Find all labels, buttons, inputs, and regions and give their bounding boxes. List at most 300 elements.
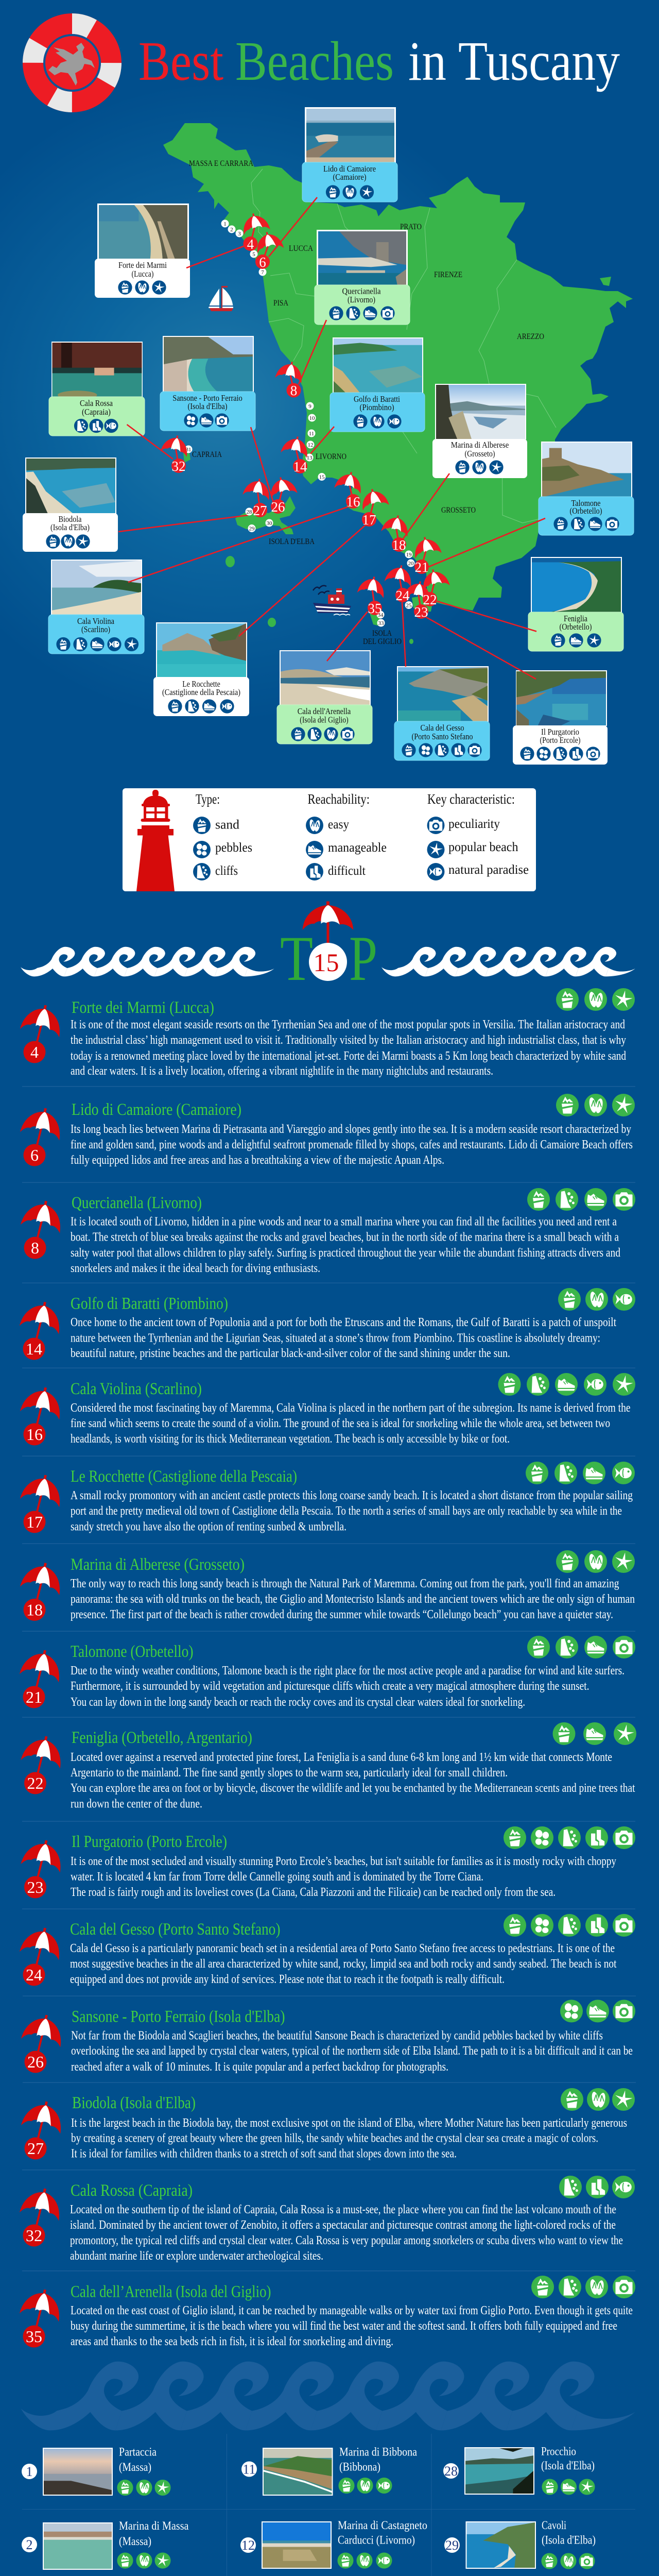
heading: Cala Rossa (Capraia) [71, 2181, 193, 2200]
small beach markers: 5 [252, 251, 255, 258]
province labels: CAPRAIA [192, 450, 222, 459]
beach 12 Marina di Castagneto Carducci: Marina di Castagneto [338, 2519, 427, 2532]
beach 12 Marina di Castagneto Carducci [240, 2519, 427, 2569]
list entry: Cala Violina [20, 1373, 635, 1446]
heading: Top 15 [21, 902, 635, 994]
marker 23: 23 [27, 1878, 43, 1896]
icons [556, 1550, 635, 1573]
panel [528, 612, 623, 651]
beach 29 Cavoli: Cavoli [542, 2519, 566, 2532]
province labels: DEL GIGLIO [363, 637, 402, 646]
description [71, 1018, 626, 1078]
wave left [21, 947, 274, 976]
beach 28 Procchio: Procchio [541, 2445, 576, 2458]
panel [48, 615, 144, 654]
marker 4 [20, 1001, 65, 1063]
small beach markers: 11 [309, 431, 314, 437]
photo [25, 457, 116, 514]
location: (Scarlino) [81, 624, 110, 634]
photo [397, 666, 489, 722]
card: Cala dell'Arenella [277, 650, 372, 744]
description [71, 1577, 635, 1621]
column: type: Type: [196, 791, 220, 807]
name: Cala Rossa [80, 398, 113, 408]
top 15 umbrella markers on map: 27 [253, 503, 267, 518]
card: Sansone - Porto Ferraio [160, 336, 255, 431]
description [71, 1401, 630, 1446]
heading: Il Purgatorio (Porto Ercole) [72, 1833, 227, 1851]
title [138, 31, 620, 92]
beach 29 Cavoli: (Isola d'Elba) [542, 2534, 596, 2546]
column: key characteristic: Key characteristic: [427, 791, 515, 807]
description [71, 1489, 633, 1533]
photo [97, 204, 189, 259]
name: Cala Violina [77, 616, 114, 626]
icons [556, 1094, 635, 1116]
icons [553, 1722, 636, 1745]
column: type: sand [215, 818, 240, 832]
list entry: Cala del Gesso [20, 1914, 635, 1986]
small beach markers: 33 [378, 620, 384, 626]
icons [118, 280, 166, 295]
location: (Grosseto) [464, 449, 495, 459]
card: Cala del Gesso [394, 666, 490, 760]
list entry: Cala Rossa [20, 2176, 635, 2263]
small beach markers: 1 [223, 221, 227, 227]
location: (Castiglione della Pescaia) [162, 687, 240, 697]
province labels: MASSA E CARRARA [189, 159, 253, 168]
card: Quercianella [315, 230, 410, 325]
icons [504, 1914, 635, 1937]
card: Golfo di Baratti [330, 337, 425, 432]
column: reachability: Reachability: [308, 791, 370, 807]
island: Giglio [370, 613, 385, 626]
beach 2 Marina di Massa: Marina di Massa [119, 2519, 188, 2532]
title: in [408, 31, 446, 92]
heading: Talomone (Orbetello) [71, 1642, 194, 1661]
marker 22: 22 [27, 1774, 43, 1792]
small beach markers: 30 [267, 520, 272, 527]
location: (Camaiore) [333, 172, 367, 182]
icons [559, 2176, 635, 2198]
small beach markers: 10 [309, 415, 315, 421]
photo [156, 622, 247, 677]
icons [402, 743, 482, 757]
list entry: Quercianella [21, 1188, 635, 1275]
panel [302, 162, 397, 202]
description [71, 1316, 616, 1360]
beach 1 Partaccia: Partaccia [119, 2445, 157, 2459]
small beach markers: 15 [319, 474, 325, 480]
panel [432, 439, 527, 478]
beach 2 Marina di Massa: 2 [26, 2537, 33, 2552]
province labels: PISA [273, 299, 288, 308]
beach 28 Procchio: (Isola d'Elba) [541, 2459, 595, 2472]
icons [455, 460, 504, 474]
island: Montecristo [268, 618, 276, 627]
heading: Quercianella (Livorno) [72, 1194, 202, 1212]
panel [315, 285, 410, 325]
icons [526, 1462, 635, 1484]
photo [305, 107, 396, 163]
location: (Orbetello) [569, 506, 602, 516]
connector lines from cards to markers [118, 197, 545, 679]
top 15 umbrella markers on map: 22 [423, 592, 437, 607]
province labels: ISOLA D'ELBA [269, 537, 315, 546]
panel [513, 725, 608, 765]
top 15 umbrella markers on map: 23 [414, 604, 428, 620]
list entry: Il Purgatorio [21, 1826, 635, 1899]
location: (Lucca) [132, 269, 153, 279]
top 15 umbrella markers on map: 14 [293, 459, 307, 474]
panel [330, 393, 425, 432]
heading: Lido di Camaiore (Camaiore) [72, 1100, 241, 1119]
beach 1 Partaccia [22, 2445, 171, 2496]
column: key characteristic [427, 791, 529, 880]
small beach markers: 34 [378, 612, 384, 618]
marker 35 [20, 2285, 65, 2347]
description: fully equipped lidos and free areas and has a breathtaking a view of the majestic Apuan Alps. [71, 1154, 444, 1167]
photo [51, 560, 142, 615]
top 15 umbrella markers on map: 18 [392, 537, 406, 553]
heading: Golfo di Baratti (Piombino) [71, 1294, 228, 1313]
card: Biodola [23, 457, 118, 552]
description: Argentario to the mainland. The fine sand gently slopes to the warm sea, particularly ideal for small children. [71, 1766, 508, 1780]
marker 35: 35 [26, 2327, 42, 2346]
column: key characteristic: popular beach [448, 840, 518, 854]
province borders [251, 169, 556, 523]
description: It is ideal for families with children thanks to a stretch of soft sand that slopes down into the sea. [71, 2147, 457, 2161]
province labels: LUCCA [289, 244, 313, 253]
marker 24: 24 [26, 1965, 42, 1984]
description: equipped and does not provide any kind of services. Please note that to reach it the footpath is really difficult. [70, 1973, 505, 1986]
icons [329, 306, 395, 320]
description [70, 1942, 617, 1986]
heading: Cala Violina (Scarlino) [71, 1380, 202, 1398]
column: type [193, 791, 252, 880]
marker 14 [20, 1298, 65, 1360]
name: Feniglia [564, 614, 587, 623]
description: You can lay down in the long sandy beach or reach the rocky coves and its crystal clear waters ideal for snorkeling. [71, 1696, 525, 1709]
marker 21: 21 [26, 1688, 42, 1706]
marker 32 [20, 2184, 65, 2246]
title: Beaches [235, 31, 394, 92]
list entry: Marina di Alberese [20, 1550, 635, 1621]
wave right [381, 947, 635, 976]
description: run down the center of the dune. [71, 1797, 202, 1810]
description [71, 1751, 635, 1810]
marker 4: 4 [30, 1043, 39, 1061]
description: snorkelers and makes it the ideal beach for diving enthusiasts. [71, 1262, 320, 1275]
list entry: Golfo di Baratti [20, 1288, 635, 1360]
marker 17: 17 [26, 1513, 43, 1531]
name: Talomone [571, 498, 600, 508]
list entry: Sansone [21, 2000, 635, 2074]
name: Lido di Camaiore [323, 164, 376, 174]
top 15 umbrella markers on map: 26 [271, 499, 285, 515]
beach 2 Marina di Massa [22, 2519, 188, 2570]
icons [168, 699, 234, 714]
icons [527, 1636, 635, 1658]
top 15 umbrella markers on map: 21 [415, 560, 428, 575]
marker 18: 18 [26, 1600, 43, 1619]
description [71, 1664, 625, 1709]
marker 6 [20, 1104, 65, 1166]
list entry: Lido di Camaiore [20, 1094, 635, 1167]
top 15 umbrella markers on map: 16 [346, 494, 360, 510]
heading: Forte dei Marmi (Lucca) [72, 998, 214, 1017]
photo [317, 230, 408, 285]
top 15 umbrella markers on map: 8 [290, 383, 297, 398]
column: key characteristic: natural paradise [448, 863, 529, 877]
column: reachability [306, 791, 387, 880]
heading: Top 15: 15 [313, 948, 339, 977]
icons [504, 1826, 635, 1849]
column: reachability: easy [328, 818, 349, 832]
photo [531, 557, 622, 613]
beach 1 Partaccia: 1 [26, 2464, 33, 2479]
top 15 umbrella markers on map: 24 [395, 588, 410, 603]
small beach markers: 20 [408, 561, 414, 567]
small beach markers: 28 [246, 509, 252, 515]
beach 11 Marina di Bibbona: (Bibbona) [339, 2461, 380, 2473]
description: reached after a walk of 10 minutes. It is quite popular and a perfect backdrop for photographs. [71, 2060, 448, 2074]
beach 1 Partaccia: (Massa) [119, 2461, 151, 2473]
column: key characteristic: peculiarity [448, 817, 500, 831]
top 15 umbrella markers on map: 17 [362, 512, 376, 528]
card: Forte dei Marmi [95, 204, 190, 298]
logo: lifebuoy with Pegasus [23, 13, 122, 112]
umbrella [303, 902, 353, 948]
icons [553, 517, 619, 531]
icons [46, 534, 90, 549]
marker 26 [21, 2011, 66, 2073]
province labels: FIRENZE [434, 270, 462, 279]
marker 32: 32 [26, 2226, 42, 2245]
small beach markers: 31 [185, 447, 192, 453]
marker 24 [20, 1924, 65, 1986]
card: Talomone [539, 442, 634, 535]
column: type: cliffs [215, 864, 238, 878]
province labels: PRATO [400, 223, 422, 231]
province labels: GROSSETO [441, 506, 476, 515]
icons [527, 1188, 635, 1211]
description [71, 1855, 616, 1899]
heading: Marina di Alberese (Grosseto) [71, 1555, 245, 1574]
small beach markers: 3 [238, 231, 241, 237]
letter T: T [280, 923, 313, 994]
description: water. It is located 4 km far from Torre delle Cannelle going south and is dominated by the Torre Ciana. [71, 1870, 483, 1884]
title: Best [138, 31, 223, 92]
location: (Livorno) [348, 295, 375, 304]
Argentario [412, 595, 432, 612]
name: Forte dei Marmi [118, 260, 167, 270]
column: reachability: difficult [328, 864, 366, 878]
location: (Isola del Giglio) [300, 715, 349, 724]
marker 23 [21, 1836, 66, 1898]
icons [560, 2000, 635, 2023]
island: Pianosa [226, 556, 235, 567]
list entry: Feniglia [21, 1722, 636, 1810]
panel [49, 397, 145, 436]
beach 11 Marina di Bibbona: Marina di Bibbona [339, 2445, 417, 2459]
small beach markers [184, 219, 415, 626]
small beach markers: 13 [307, 455, 313, 461]
card: Le Rocchette [153, 622, 249, 716]
description: areas and thanks to the sea beds rich in fish, it is ideal for snorkeling and diving. [71, 2335, 393, 2348]
beach 11 Marina di Bibbona [241, 2445, 417, 2496]
province labels: LIVORNO [316, 452, 346, 461]
name: Quercianella [342, 286, 381, 296]
location: (Capraia) [82, 407, 111, 417]
heading: Sansone - Porto Ferraio (Isola d'Elba) [72, 2007, 285, 2026]
top 15 umbrella markers on map: 35 [368, 601, 382, 616]
list entry: Biodola [21, 2088, 635, 2161]
location: (Piombino) [359, 402, 394, 412]
icon: sailboat [209, 286, 233, 311]
photo [51, 342, 143, 399]
beach 12 Marina di Castagneto Carducci: 12 [241, 2538, 255, 2553]
photo [435, 384, 526, 439]
location: (Isola d'Elba) [50, 522, 90, 532]
card: Il Purgatorio [513, 670, 608, 765]
marker 16: 16 [26, 1425, 43, 1444]
province labels: AREZZO [517, 332, 544, 341]
icons [74, 419, 118, 433]
beach 29 Cavoli [444, 2519, 596, 2569]
icons [184, 413, 229, 428]
marker 21 [20, 1646, 65, 1708]
panel [160, 392, 255, 431]
icons [353, 414, 402, 429]
top 15 umbrella markers on map: 32 [172, 459, 185, 474]
photo [163, 336, 254, 392]
marker 26: 26 [27, 2053, 44, 2071]
big faded wave [21, 2362, 635, 2430]
icons [531, 2276, 635, 2298]
mainland [163, 123, 633, 611]
small beach markers: 9 [308, 403, 311, 410]
panel [277, 705, 372, 744]
beach 28 Procchio [443, 2445, 595, 2495]
description: abundant marine life or explore underwater archeological sites. [70, 2249, 323, 2263]
name: Golfo di Baratti [354, 394, 400, 404]
location: (Isola d'Elba) [187, 401, 228, 411]
location: (Porto Santo Stefano [412, 732, 473, 741]
beach 28 Procchio: 28 [444, 2464, 458, 2479]
heading: Cala dell’Arenella (Isola del Giglio) [71, 2282, 271, 2301]
marker 27 [21, 2097, 66, 2160]
letter P: P [349, 923, 377, 994]
icons [291, 727, 355, 741]
top 15 umbrella markers on map: 4 [247, 236, 254, 252]
name: Cala del Gesso [420, 723, 464, 733]
beach 11 Marina di Bibbona: 11 [242, 2462, 256, 2477]
name: Cala dell'Arenella [298, 706, 351, 716]
province labels [189, 159, 544, 646]
icons [520, 747, 600, 761]
marker 8: 8 [31, 1239, 39, 1257]
marker 17 [20, 1471, 65, 1533]
marker 14: 14 [26, 1340, 42, 1358]
icons [558, 1288, 635, 1311]
legend panel [123, 788, 536, 891]
top 15 umbrella markers on map [161, 211, 450, 620]
list entry: Talomone [20, 1636, 635, 1709]
card: Cala Rossa [49, 342, 145, 436]
beach 12 Marina di Castagneto Carducci: Carducci (Livorno) [338, 2534, 415, 2546]
description: headlands, is worth visiting for its thick Mediterranean vegetation. The beach is only accessible by bike or foot. [71, 1432, 510, 1446]
panel [23, 513, 118, 552]
province labels: ISOLA [372, 629, 392, 638]
island: Capraia [183, 452, 190, 463]
description: sandy stretch you have also the option of renting sunbed & umbrella. [71, 1520, 346, 1533]
icons [326, 185, 374, 199]
small beach markers: 12 [308, 442, 313, 448]
small beach markers: 2 [230, 227, 233, 233]
description: beautiful nature, pristine beaches and the particular black-and-silver color of the sand shining under the sun. [71, 1347, 510, 1360]
icons [556, 988, 635, 1011]
description [71, 2116, 627, 2161]
top 15 umbrella markers on map: 6 [259, 255, 266, 270]
location: (Porto Ercole) [540, 735, 581, 745]
description [71, 2304, 633, 2348]
island: Elba [235, 496, 296, 534]
photo [333, 337, 423, 393]
small beach markers: 29 [249, 526, 255, 532]
beach 2 Marina di Massa: (Massa) [119, 2535, 151, 2548]
marker 27: 27 [27, 2139, 44, 2158]
circle with 15 [309, 943, 347, 981]
panel [539, 497, 634, 535]
name: Il Purgatorio [541, 727, 579, 737]
description [71, 2029, 633, 2074]
card: Lido di Camaiore [302, 107, 397, 202]
marker 18 [20, 1559, 65, 1621]
small beach markers: 25 [406, 603, 412, 609]
list entry: Le Rocchette [20, 1462, 635, 1533]
title: Tuscany [458, 31, 620, 92]
icon: lighthouse [136, 790, 175, 891]
column: type: pebbles [215, 841, 252, 855]
heading: Feniglia (Orbetello, Argentario) [72, 1728, 252, 1747]
panel [95, 259, 190, 298]
heading: Le Rocchette (Castiglione della Pescaia) [71, 1467, 297, 1486]
description [71, 1215, 620, 1275]
photo [541, 442, 632, 497]
small beach markers: 7 [261, 269, 264, 276]
photo [280, 650, 371, 705]
list entry: Forte dei Marmi [20, 988, 635, 1078]
name: Biodola [59, 514, 82, 524]
icons [551, 633, 601, 648]
card: Marina di Alberese [432, 384, 527, 478]
description [71, 1123, 633, 1167]
island: Giannutri [409, 639, 413, 644]
marker 6: 6 [30, 1146, 39, 1164]
icons [561, 2088, 635, 2111]
card: Cala Violina [48, 560, 144, 654]
beach 29 Cavoli: 29 [445, 2538, 459, 2553]
name: Le Rocchette [182, 679, 220, 689]
panel [394, 721, 490, 760]
map of Tuscany [163, 123, 633, 644]
list entry: Cala dell'Arenella [20, 2276, 635, 2348]
marker 8 [21, 1197, 66, 1259]
marker 16 [20, 1383, 65, 1446]
marker 22 [21, 1732, 66, 1794]
description [70, 2203, 623, 2263]
